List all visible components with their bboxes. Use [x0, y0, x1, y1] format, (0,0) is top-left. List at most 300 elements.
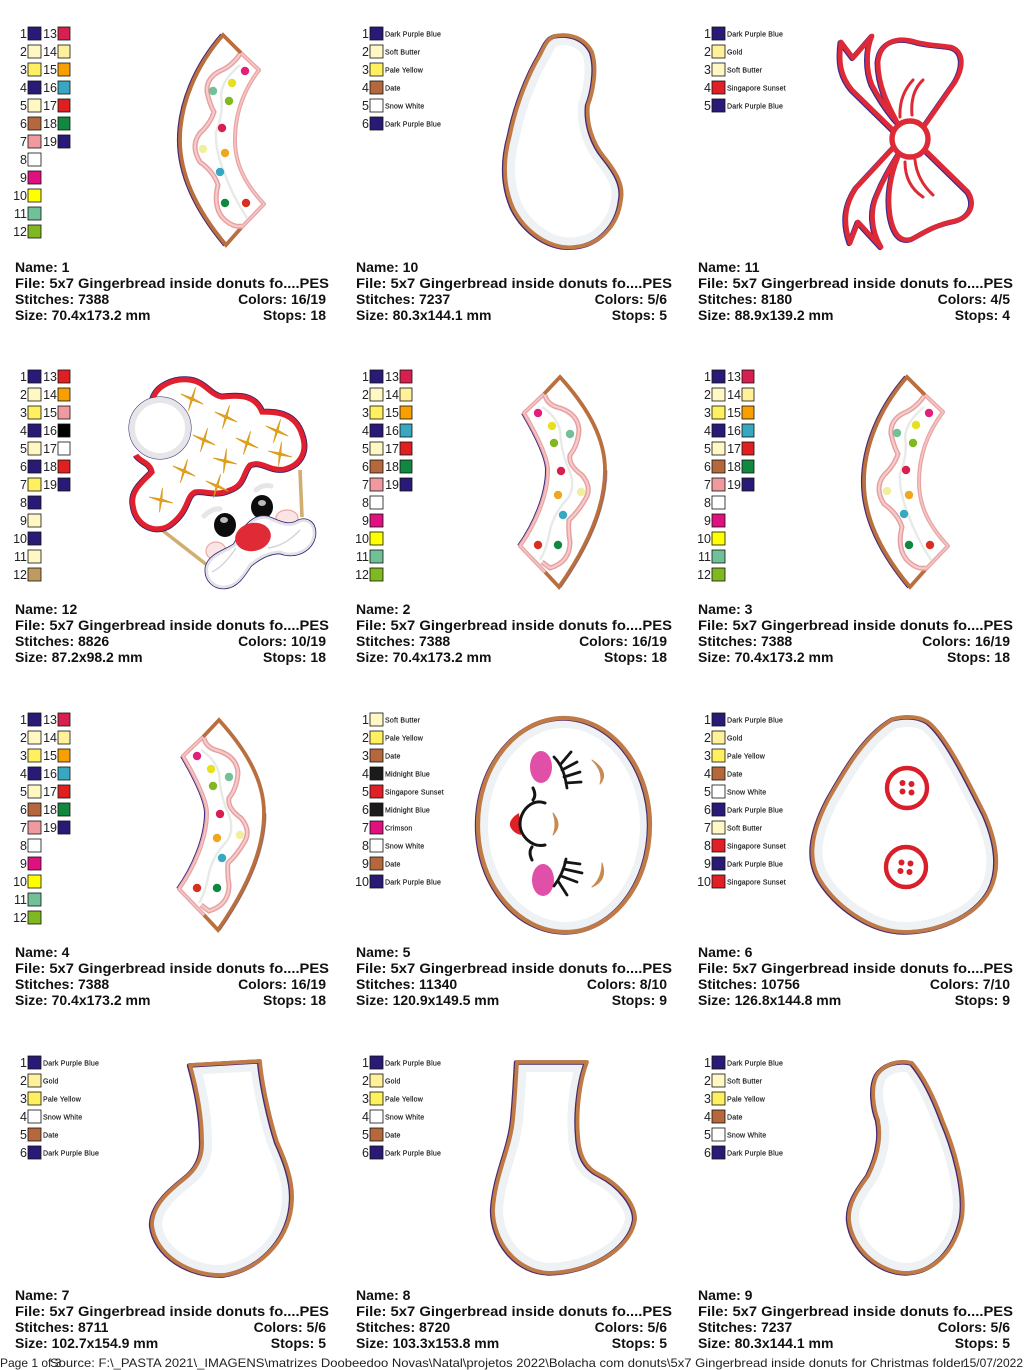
legend: design 9 colours: Dark Purple Blue — [727, 1150, 783, 1158]
legend: design 1 colours: 14 — [43, 45, 57, 59]
legend: design 3 colours: 19 — [727, 478, 741, 492]
legend: design 4 colours: 15 — [43, 749, 57, 763]
legend: design 6 colours: Singapore Sunset — [727, 844, 786, 850]
legend: design 9 colours: Pale Yellow — [727, 1096, 766, 1104]
legend: design 4 colours: 2 — [20, 731, 27, 745]
legend: design 3 colours: 15 — [727, 406, 741, 420]
info block: design 8: Colors: 5/6 — [595, 1319, 667, 1335]
legend: design 12 colours: 19 — [43, 478, 57, 492]
embroidery: bean outline — [504, 35, 622, 248]
legend: design 12 colours: 16 — [43, 424, 57, 438]
legend: design 10 colours: 3 — [362, 63, 369, 77]
legend: design 3 colours: 7 — [704, 478, 711, 492]
info block: design 4: Stops: 18 — [263, 992, 326, 1008]
legend: design 6 colours: Pale Yellow — [727, 754, 766, 760]
legend: design 6 colours: 6 — [704, 803, 711, 817]
legend: design 2 colours: 14 — [385, 388, 399, 402]
info block: design 8: Stitches: 8720 — [356, 1319, 450, 1335]
info block: design 1 — [15, 259, 329, 323]
legend: design 4 colours: 11 — [14, 893, 27, 907]
legend: design 6 colours: 1 — [704, 713, 711, 727]
legend: design 4 colours: 4 — [20, 767, 27, 781]
legend: design 9 colours — [704, 1056, 783, 1160]
info block: design 1: Colors: 16/19 — [238, 291, 326, 307]
legend: design 5 colours: 3 — [362, 749, 369, 763]
legend: design 5 colours: 10 — [355, 875, 369, 889]
legend: design 5 colours: 6 — [362, 803, 369, 817]
panel: design 2 — [355, 370, 672, 665]
legend: design 5 colours: Date — [385, 862, 401, 868]
legend: design 8 colours: 4 — [362, 1110, 369, 1124]
Santa cheeks — [206, 510, 298, 560]
legend: design 6 colours: 5 — [704, 785, 711, 799]
info block: design 7: File: 5x7 Gingerbread inside donuts fo....PES — [15, 1303, 329, 1319]
legend: design 1 colours — [13, 27, 70, 239]
legend: design 12 colours: 11 — [14, 550, 27, 564]
legend: design 5 colours: Date — [385, 754, 401, 760]
panel: design 11 — [698, 27, 1013, 323]
legend: design 3 colours: 16 — [727, 424, 741, 438]
legend: design 6 colours: 4 — [704, 767, 711, 781]
info block: design 4: Name: 4 — [15, 944, 70, 960]
legend: design 3 colours — [697, 370, 754, 582]
red nose — [510, 813, 521, 835]
legend: design 11 colours: 5 — [704, 99, 711, 113]
legend: design 2 colours: 16 — [385, 424, 399, 438]
legend: design 5 colours: 2 — [362, 731, 369, 745]
legend: design 8 colours: Dark Purple Blue — [385, 1060, 441, 1068]
legend: design 3 colours: 14 — [727, 388, 741, 402]
embroidery: gingerbread Santa — [129, 380, 314, 587]
legend: design 3 colours: 5 — [704, 442, 711, 456]
legend: design 3 colours: 6 — [704, 460, 711, 474]
legend: design 12 colours: 15 — [43, 406, 57, 420]
info block: design 5: Name: 5 — [356, 944, 411, 960]
info block: design 3: Size: 70.4x173.2 mm — [698, 649, 833, 665]
legend: design 12 colours: 17 — [43, 442, 57, 456]
embroidery: donut arc piece 1 — [179, 35, 264, 245]
panel: design 10 — [356, 27, 672, 323]
legend: design 9 colours: Dark Purple Blue — [727, 1060, 783, 1068]
info block: design 7: Stops: 5 — [271, 1335, 326, 1351]
info block: design 9: Stitches: 7237 — [698, 1319, 792, 1335]
info block: design 6: Stops: 9 — [955, 992, 1010, 1008]
legend: design 9 colours: 4 — [704, 1110, 711, 1124]
legend: design 5 colours: Pale Yellow — [385, 736, 424, 742]
legend: design 5 colours: 8 — [362, 839, 369, 853]
info block: design 10: File: 5x7 Gingerbread inside donuts fo....PES — [356, 275, 672, 291]
info block: design 7 — [15, 1287, 329, 1351]
legend: design 1 colours: 8 — [20, 153, 27, 167]
legend: design 5 colours: 9 — [362, 857, 369, 871]
legend: design 11 colours: Soft Butter — [727, 68, 763, 74]
icon: lower button — [886, 847, 926, 887]
legend: design 4 colours: 16 — [43, 767, 57, 781]
Santa red nose — [232, 520, 274, 554]
panel: design 9 — [698, 1056, 1013, 1351]
legend: design 11 colours — [704, 27, 786, 113]
info block: design 3: Name: 3 — [698, 601, 753, 617]
info block: design 3: Stops: 18 — [947, 649, 1010, 665]
legend: design 5 colours: Soft Butter — [385, 718, 421, 724]
info block: design 2: File: 5x7 Gingerbread inside donuts fo....PES — [356, 617, 672, 633]
legend: design 10 colours: Date — [385, 86, 401, 92]
info block: design 10 — [356, 259, 672, 323]
info block: design 10: Name: 10 — [356, 259, 418, 275]
legend: design 8 colours: Gold — [385, 1078, 401, 1086]
legend: design 5 colours: Midnight Blue — [385, 808, 430, 814]
icon: hat pompom — [129, 397, 191, 459]
info block: design 5: Colors: 8/10 — [587, 976, 667, 992]
legend: design 11 colours: Dark Purple Blue — [727, 104, 783, 110]
legend: design 5 colours: 5 — [362, 785, 369, 799]
legend: design 7 colours: Pale Yellow — [43, 1096, 82, 1104]
legend: design 11 colours: 3 — [704, 63, 711, 77]
legend: design 10 colours: 1 — [362, 27, 369, 41]
info block: design 12: Colors: 10/19 — [238, 633, 326, 649]
embroidery: cookie body with buttons — [811, 717, 996, 932]
legend: design 2 colours: 17 — [385, 442, 399, 456]
legend: design 8 colours: 6 — [362, 1146, 369, 1160]
legend: design 4 colours: 17 — [43, 785, 57, 799]
legend: design 10 colours — [362, 27, 441, 131]
legend: design 5 colours: 7 — [362, 821, 369, 835]
legend: design 7 colours: 4 — [20, 1110, 27, 1124]
legend: design 1 colours: 4 — [20, 81, 27, 95]
legend: design 5 colours: 4 — [362, 767, 369, 781]
info block: design 6: Name: 6 — [698, 944, 753, 960]
info block: design 11: Size: 88.9x139.2 mm — [698, 307, 833, 323]
info block: design 9: Colors: 5/6 — [938, 1319, 1010, 1335]
legend: design 2 colours: 18 — [385, 460, 399, 474]
footer: page number, source path and date: Page 1 of 3 — [0, 1356, 62, 1370]
legend: design 7 colours: Snow White — [43, 1114, 82, 1122]
embroidery: stocking outline facing left — [151, 1061, 292, 1276]
legend: design 1 colours: 5 — [20, 99, 27, 113]
legend: design 6 colours: 8 — [704, 839, 711, 853]
legend: design 1 colours: 9 — [20, 171, 27, 185]
icons: gold hat stars — [148, 388, 293, 513]
legend: design 9 colours: Soft Butter — [727, 1078, 763, 1086]
info block: design 8 — [356, 1287, 672, 1351]
legend: design 10 colours: 2 — [362, 45, 369, 59]
legend: design 8 colours: 5 — [362, 1128, 369, 1142]
legend: design 1 colours: 1 — [20, 27, 27, 41]
info block: design 5: File: 5x7 Gingerbread inside donuts fo....PES — [356, 960, 672, 976]
info block: design 11: Stitches: 8180 — [698, 291, 792, 307]
legend: design 3 colours: 2 — [704, 388, 711, 402]
legend: design 4 colours: 10 — [13, 875, 27, 889]
legend: design 2 colours: 12 — [355, 568, 369, 582]
legend: design 2 colours: 19 — [385, 478, 399, 492]
info block: design 5: Size: 120.9x149.5 mm — [356, 992, 499, 1008]
info block: design 8: Size: 103.3x153.8 mm — [356, 1335, 499, 1351]
legend: design 2 colours — [355, 370, 412, 582]
info block: design 9: Stops: 5 — [955, 1335, 1010, 1351]
legend: design 4 colours: 14 — [43, 731, 57, 745]
info block: design 4: File: 5x7 Gingerbread inside donuts fo....PES — [15, 960, 329, 976]
info block: design 12: File: 5x7 Gingerbread inside donuts fo....PES — [15, 617, 329, 633]
legend: design 6 colours: Date — [727, 772, 743, 778]
info block: design 2: Size: 70.4x173.2 mm — [356, 649, 491, 665]
panel: design 5 — [355, 713, 672, 1008]
info block: design 12: Size: 87.2x98.2 mm — [15, 649, 143, 665]
legend: design 12 colours — [13, 370, 70, 582]
legend: design 12 colours: 8 — [20, 496, 27, 510]
legend: design 4 colours: 13 — [43, 713, 57, 727]
info block: design 5: Stops: 9 — [612, 992, 667, 1008]
legend: design 1 colours: 10 — [13, 189, 27, 203]
info block: design 6: File: 5x7 Gingerbread inside donuts fo....PES — [698, 960, 1013, 976]
legend: design 8 colours: 1 — [362, 1056, 369, 1070]
legend: design 2 colours: 10 — [355, 532, 369, 546]
legend: design 4 colours: 1 — [20, 713, 27, 727]
info block: design 11: File: 5x7 Gingerbread inside donuts fo....PES — [698, 275, 1013, 291]
info block: design 12: Stitches: 8826 — [15, 633, 109, 649]
Santa moustache — [207, 517, 314, 587]
info block: design 1: Stops: 18 — [263, 307, 326, 323]
legend: design 1 colours: 18 — [43, 117, 57, 131]
legend: design 12 colours: 1 — [20, 370, 27, 384]
legend: design 4 colours: 5 — [20, 785, 27, 799]
legend: design 3 colours: 11 — [698, 550, 711, 564]
legend: design 2 colours: 6 — [362, 460, 369, 474]
panel: design 7 — [15, 1056, 329, 1351]
info block: design 5: Stitches: 11340 — [356, 976, 457, 992]
info block: design 1: Stitches: 7388 — [15, 291, 109, 307]
info block: design 3: Stitches: 7388 — [698, 633, 792, 649]
legend: design 11 colours: 4 — [704, 81, 711, 95]
legend: design 9 colours: Snow White — [727, 1132, 766, 1140]
legend: design 10 colours: Soft Butter — [385, 50, 421, 56]
info block: design 11: Colors: 4/5 — [938, 291, 1010, 307]
legend: design 5 colours: 1 — [362, 713, 369, 727]
legend: design 12 colours: 18 — [43, 460, 57, 474]
info block: design 12: Name: 12 — [15, 601, 77, 617]
legend: design 9 colours: 5 — [704, 1128, 711, 1142]
info block: design 7: Name: 7 — [15, 1287, 70, 1303]
legend: design 3 colours: 13 — [727, 370, 741, 384]
legend: design 5 colours: Midnight Blue — [385, 772, 430, 778]
legend: design 12 colours: 7 — [20, 478, 27, 492]
legend: design 5 colours — [355, 713, 444, 889]
legend: design 1 colours: 15 — [43, 63, 57, 77]
info block: design 11: Name: 11 — [698, 259, 760, 275]
icon: upper button — [887, 768, 927, 808]
info block: design 10: Size: 80.3x144.1 mm — [356, 307, 491, 323]
embroidery: donut arc piece 4 — [178, 720, 266, 930]
info block: design 2: Stitches: 7388 — [356, 633, 450, 649]
legend: design 1 colours: 3 — [20, 63, 27, 77]
info block: design 12 — [15, 601, 329, 665]
info block: design 3: Colors: 16/19 — [922, 633, 1010, 649]
info block: design 8: Name: 8 — [356, 1287, 411, 1303]
embroidery: donut arc piece 2 — [519, 377, 607, 588]
info block: design 10: Colors: 5/6 — [595, 291, 667, 307]
legend: design 1 colours: 17 — [43, 99, 57, 113]
panel: design 12 — [13, 370, 329, 665]
legend: design 10 colours: 5 — [362, 99, 369, 113]
legend: design 6 colours — [697, 713, 786, 889]
legend: design 4 colours — [13, 713, 70, 925]
legend: design 2 colours: 7 — [362, 478, 369, 492]
legend: design 12 colours: 9 — [20, 514, 27, 528]
legend: design 10 colours: Snow White — [385, 104, 424, 110]
embroidery: donut arc piece 3 — [863, 377, 948, 587]
info block: design 6: Size: 126.8x144.8 mm — [698, 992, 841, 1008]
closed eyes with lashes — [520, 752, 582, 895]
info block: design 9: Size: 80.3x144.1 mm — [698, 1335, 833, 1351]
legend: design 3 colours: 10 — [697, 532, 711, 546]
info block: design 4: Colors: 16/19 — [238, 976, 326, 992]
info block: design 12: Stops: 18 — [263, 649, 326, 665]
legend: design 10 colours: 6 — [362, 117, 369, 131]
legend: design 2 colours: 2 — [362, 388, 369, 402]
info block: design 2: Name: 2 — [356, 601, 411, 617]
info block: design 8: File: 5x7 Gingerbread inside donuts fo....PES — [356, 1303, 672, 1319]
legend: design 8 colours: 2 — [362, 1074, 369, 1088]
info block: design 6 — [698, 944, 1013, 1008]
legend: design 12 colours: 6 — [20, 460, 27, 474]
legend: design 1 colours: 11 — [14, 207, 27, 221]
info block: design 4 — [15, 944, 329, 1008]
legend: design 5 colours: Snow White — [385, 844, 424, 850]
legend: design 7 colours — [20, 1056, 99, 1160]
legend: design 2 colours: 4 — [362, 424, 369, 438]
legend: design 3 colours: 3 — [704, 406, 711, 420]
legend: design 6 colours: 3 — [704, 749, 711, 763]
legend: design 7 colours: Date — [43, 1132, 59, 1140]
legend: design 1 colours: 19 — [43, 135, 57, 149]
info block: design 9: File: 5x7 Gingerbread inside donuts fo....PES — [698, 1303, 1013, 1319]
legend: design 4 colours: 7 — [20, 821, 27, 835]
info block: design 1: Size: 70.4x173.2 mm — [15, 307, 150, 323]
legend: design 12 colours: 5 — [20, 442, 27, 456]
info block: design 7: Stitches: 8711 — [15, 1319, 109, 1335]
legend: design 9 colours: 2 — [704, 1074, 711, 1088]
legend: design 7 colours: 3 — [20, 1092, 27, 1106]
legend: design 11 colours: 1 — [704, 27, 711, 41]
legend: design 4 colours: 8 — [20, 839, 27, 853]
legend: design 7 colours: 5 — [20, 1128, 27, 1142]
legend: design 11 colours: 2 — [704, 45, 711, 59]
panel: design 1 — [13, 27, 329, 323]
legend: design 2 colours: 13 — [385, 370, 399, 384]
legend: design 6 colours: Gold — [727, 736, 743, 742]
info block: design 5 — [356, 944, 672, 1008]
legend: design 7 colours: Gold — [43, 1078, 59, 1086]
legend: design 12 colours: 3 — [20, 406, 27, 420]
legend: design 7 colours: Dark Purple Blue — [43, 1060, 99, 1068]
legend: design 6 colours: Soft Butter — [727, 826, 763, 832]
legend: design 5 colours: Crimson — [385, 826, 412, 832]
legend: design 10 colours: 4 — [362, 81, 369, 95]
panel: design 4 — [13, 713, 329, 1008]
legend: design 4 colours: 3 — [20, 749, 27, 763]
info block: design 7: Size: 102.7x154.9 mm — [15, 1335, 158, 1351]
legend: design 5 colours: Singapore Sunset — [385, 790, 444, 796]
legend: design 1 colours: 7 — [20, 135, 27, 149]
legend: design 7 colours: 1 — [20, 1056, 27, 1070]
legend: design 6 colours: 10 — [697, 875, 711, 889]
legend: design 2 colours: 9 — [362, 514, 369, 528]
info block: design 3 — [698, 601, 1013, 665]
info block: design 1: Name: 1 — [15, 259, 70, 275]
legend: design 8 colours: 3 — [362, 1092, 369, 1106]
info block: design 11 — [698, 259, 1013, 323]
info block: design 10: Stops: 5 — [612, 307, 667, 323]
legend: design 12 colours: 10 — [13, 532, 27, 546]
info block: design 11: Stops: 4 — [955, 307, 1010, 323]
legend: design 11 colours: Singapore Sunset — [727, 86, 786, 92]
pink cheeks — [530, 751, 554, 896]
info block: design 2: Stops: 18 — [604, 649, 667, 665]
info block: design 6: Colors: 7/10 — [930, 976, 1010, 992]
legend: design 6 colours: 9 — [704, 857, 711, 871]
legend: design 2 colours: 3 — [362, 406, 369, 420]
legend: design 3 colours: 17 — [727, 442, 741, 456]
info block: design 2: Colors: 16/19 — [579, 633, 667, 649]
legend: design 12 colours: 4 — [20, 424, 27, 438]
legend: design 4 colours: 9 — [20, 857, 27, 871]
panel: design 6 — [697, 713, 1013, 1008]
embroidery: red bow — [839, 36, 972, 248]
legend: design 1 colours: 2 — [20, 45, 27, 59]
embroidery: stocking outline facing right — [492, 1062, 635, 1274]
info block: design 8: Stops: 5 — [612, 1335, 667, 1351]
legend: design 2 colours: 8 — [362, 496, 369, 510]
info block: design 4: Stitches: 7388 — [15, 976, 109, 992]
info block: design 10: Stitches: 7237 — [356, 291, 450, 307]
legend: design 8 colours: Pale Yellow — [385, 1096, 424, 1104]
legend: design 10 colours: Dark Purple Blue — [385, 32, 441, 38]
legend: design 2 colours: 5 — [362, 442, 369, 456]
legend: design 4 colours: 6 — [20, 803, 27, 817]
legend: design 1 colours: 12 — [13, 225, 27, 239]
legend: design 1 colours: 13 — [43, 27, 57, 41]
legend: design 12 colours: 2 — [20, 388, 27, 402]
legend: design 3 colours: 12 — [697, 568, 711, 582]
legend: design 11 colours: Dark Purple Blue — [727, 32, 783, 38]
legend: design 4 colours: 12 — [13, 911, 27, 925]
legend: design 4 colours: 19 — [43, 821, 57, 835]
legend: design 2 colours: 11 — [356, 550, 369, 564]
legend: design 1 colours: 6 — [20, 117, 27, 131]
legend: design 3 colours: 8 — [704, 496, 711, 510]
legend: design 4 colours: 18 — [43, 803, 57, 817]
info block: design 7: Colors: 5/6 — [254, 1319, 326, 1335]
legend: design 7 colours: 2 — [20, 1074, 27, 1088]
legend: design 5 colours: Dark Purple Blue — [385, 880, 441, 886]
legend: design 7 colours: 6 — [20, 1146, 27, 1160]
legend: design 3 colours: 18 — [727, 460, 741, 474]
info block: design 3: File: 5x7 Gingerbread inside donuts fo....PES — [698, 617, 1013, 633]
legend: design 6 colours: Singapore Sunset — [727, 880, 786, 886]
legend: design 12 colours: 14 — [43, 388, 57, 402]
panel: design 8 — [356, 1056, 672, 1351]
info block: design 2 — [356, 601, 672, 665]
panel: design 3 — [697, 370, 1013, 665]
legend: design 8 colours: Dark Purple Blue — [385, 1150, 441, 1158]
legend: design 3 colours: 1 — [704, 370, 711, 384]
legend: design 10 colours: Dark Purple Blue — [385, 122, 441, 128]
info block: design 6: Stitches: 10756 — [698, 976, 800, 992]
eye marks — [553, 760, 604, 887]
legend: design 11 colours: Gold — [727, 50, 743, 56]
legend: design 10 colours: Pale Yellow — [385, 68, 424, 74]
legend: design 2 colours: 1 — [362, 370, 369, 384]
info block: design 4: Size: 70.4x173.2 mm — [15, 992, 150, 1008]
